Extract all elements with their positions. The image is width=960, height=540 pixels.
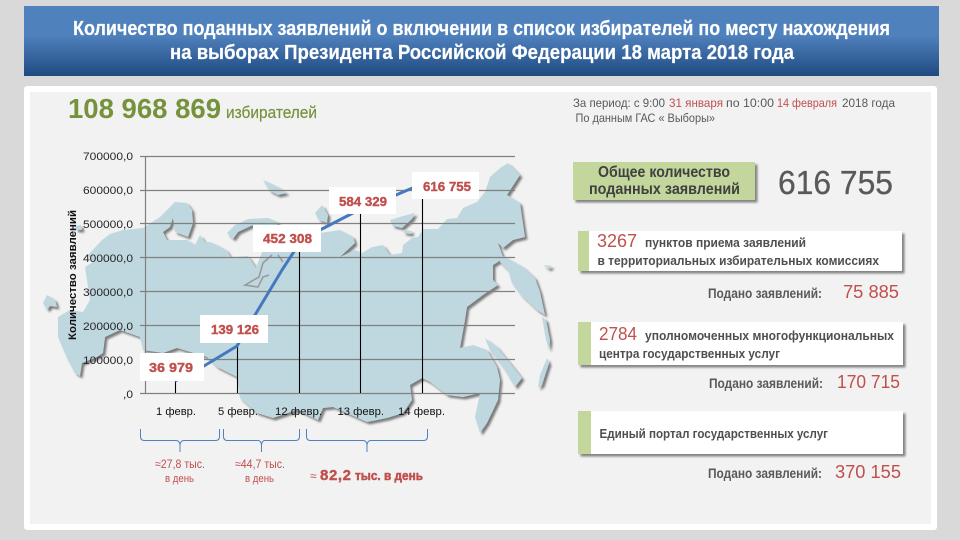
rate note 3: 82,2 [320,467,351,484]
card: unified portal: Единый портал государственных услуг [600,426,829,441]
rate note 3: ≈ [310,469,317,483]
y axis title: Количество заявлений [67,210,79,340]
brace 3 [306,429,428,452]
period note: по 10:00 [726,96,774,110]
total voters headline: избирателей [226,103,317,122]
y axis labels: 300000,0 [83,287,133,299]
data label 584 329: 584 329 [339,194,387,209]
total applications value: 616 755 [778,164,893,201]
period note: 2018 года [842,96,895,110]
data label 452 308 [253,225,321,252]
x axis labels [156,406,445,418]
card: territorial commissions: пунктов приема заявлений [645,235,806,250]
y axis labels: 700000,0 [83,151,133,163]
submitted: territorial commissions: 75 885 [843,282,899,302]
data label 584 329 [329,187,396,214]
y axis labels: 600000,0 [83,185,133,197]
period note: 31 января [669,96,723,110]
card: territorial commissions: 3267 [597,231,637,251]
card: territorial commissions [578,231,902,271]
y axis labels: 200000,0 [83,321,133,333]
x axis labels: 5 февр. [218,406,258,418]
rate note 3: тыс. в день [355,468,423,483]
x axis labels: 14 февр. [398,406,445,418]
card: multifunctional centres: уполномоченных многофункциональных [645,328,895,343]
card: multifunctional centres [578,322,903,365]
total voters headline: 108 968 869 [68,93,221,124]
drop lines [176,199,422,393]
header banner: на выборах Президента Российской Федерации 18 марта 2018 года [170,42,795,64]
rate note 2: в день [245,473,274,485]
data label 452 308: 452 308 [263,231,312,246]
line chart [67,151,515,418]
y axis labels: ,0 [123,389,133,401]
rate note 2: ≈44,7 тыс. [235,457,285,471]
submitted: multifunctional centres: Подано заявлений: [709,375,823,391]
y axis labels: 400000,0 [83,253,133,265]
rate note 3 [310,467,423,484]
x axis labels: 1 февр. [156,406,196,418]
data label 139 126 [200,315,268,343]
data line [175,184,422,381]
card: unified portal [578,411,903,454]
rate note 2 [235,457,285,485]
total applications label: Общее количество [598,164,730,181]
submitted: unified portal [708,462,901,482]
period note: По данным ГАС « Выборы» [576,111,715,125]
data label 36 979 [140,353,204,381]
y axis labels [83,151,133,401]
submitted: unified portal: Подано заявлений: [708,465,822,481]
data label 139 126: 139 126 [211,322,259,337]
y axis labels: 500000,0 [83,219,133,231]
total applications label: поданных заявлений [589,181,740,198]
period note: За период: с 9:00 [573,96,665,110]
submitted: multifunctional centres: 170 715 [837,372,900,392]
rate note 1: ≈27,8 тыс. [155,457,205,471]
header banner: Количество поданных заявлений о включении в список избирателей по месту нахождения [73,18,890,40]
header banner [24,6,939,76]
submitted: territorial commissions: Подано заявлений: [708,285,822,301]
card: multifunctional centres: центра государственных услуг [599,346,781,361]
submitted: multifunctional centres [709,372,900,392]
main panel [24,86,937,530]
data label 616 755 [412,172,479,199]
rate note 1: в день [165,473,194,485]
y axis labels: 100000,0 [83,355,133,367]
x axis labels: 12 февр. [275,406,322,418]
total voters headline [68,93,317,124]
data label 616 755: 616 755 [423,179,471,194]
period note: 14 февраля [777,96,837,110]
card: multifunctional centres: 2784 [599,324,637,344]
period note [573,96,895,125]
rate note 1 [155,457,205,485]
map of Russia [43,163,552,433]
x axis labels: 13 февр. [338,406,384,418]
total applications label [573,162,755,200]
card: territorial commissions: в территориальных избирательных комиссиях [598,253,880,268]
brace 1 [140,429,220,452]
brace 2 [224,429,300,452]
data label 36 979: 36 979 [149,360,193,375]
submitted: territorial commissions [708,282,899,302]
submitted: unified portal: 370 155 [835,462,901,482]
map inner inlet detail [245,255,283,287]
